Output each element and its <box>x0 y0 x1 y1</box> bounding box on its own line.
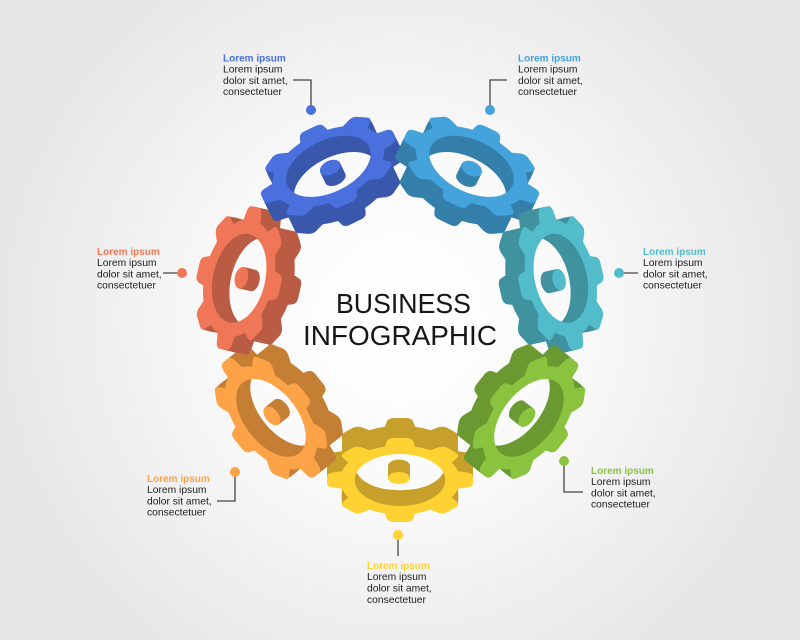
callout: light blue: dolor sit amet, <box>518 76 583 87</box>
callout: green: dolor sit amet, <box>591 488 656 500</box>
callout: light blue: Lorem ipsum <box>518 54 581 64</box>
callout: green: Lorem ipsum <box>591 477 651 488</box>
gear: blue <box>244 97 421 254</box>
callout: yellow <box>367 530 432 606</box>
callout: orange: dolor sit amet, <box>147 496 212 508</box>
callout: light blue: Lorem ipsum <box>518 64 578 76</box>
callout: teal: consectetuer <box>643 280 703 292</box>
callout: green <box>559 456 656 510</box>
gear: light blue <box>379 97 556 254</box>
gear: teal <box>484 198 618 363</box>
callout: green: consectetuer <box>591 500 651 510</box>
callout: red <box>97 247 187 292</box>
callout: teal: Lorem ipsum <box>643 258 703 269</box>
callout: teal <box>614 247 708 292</box>
callout: red: dolor sit amet, <box>97 270 162 280</box>
gear: green <box>435 322 607 501</box>
gear: red <box>182 198 316 363</box>
callout: light blue <box>485 54 583 115</box>
callout: blue: dolor sit amet, <box>223 76 288 87</box>
callout: yellow: consectetuer <box>367 595 427 606</box>
callout: teal: Lorem ipsum <box>643 247 706 258</box>
callout: light blue: consectetuer <box>518 87 578 98</box>
gear: yellow <box>327 418 473 522</box>
title <box>303 288 497 351</box>
gear: orange <box>193 322 365 501</box>
callout: red: consectetuer <box>97 280 157 292</box>
callout: yellow: Lorem ipsum <box>367 561 430 572</box>
callout: blue: consectetuer <box>223 87 283 98</box>
callout: orange: Lorem ipsum <box>147 485 207 496</box>
callout: blue: Lorem ipsum <box>223 64 283 76</box>
callout: orange <box>147 467 240 518</box>
title: BUSINESS <box>336 288 471 319</box>
callout: yellow: Lorem ipsum <box>367 572 427 583</box>
callout: green: Lorem ipsum <box>591 466 654 477</box>
callout: teal: dolor sit amet, <box>643 270 708 280</box>
callout: red: Lorem ipsum <box>97 258 157 269</box>
callout: blue <box>223 54 316 115</box>
title: INFOGRAPHIC <box>303 320 497 351</box>
callout: yellow: dolor sit amet, <box>367 584 432 594</box>
callout: orange: consectetuer <box>147 508 207 518</box>
callout: blue: Lorem ipsum <box>223 54 286 64</box>
callout: red: Lorem ipsum <box>97 247 160 258</box>
callout: orange: Lorem ipsum <box>147 474 210 485</box>
